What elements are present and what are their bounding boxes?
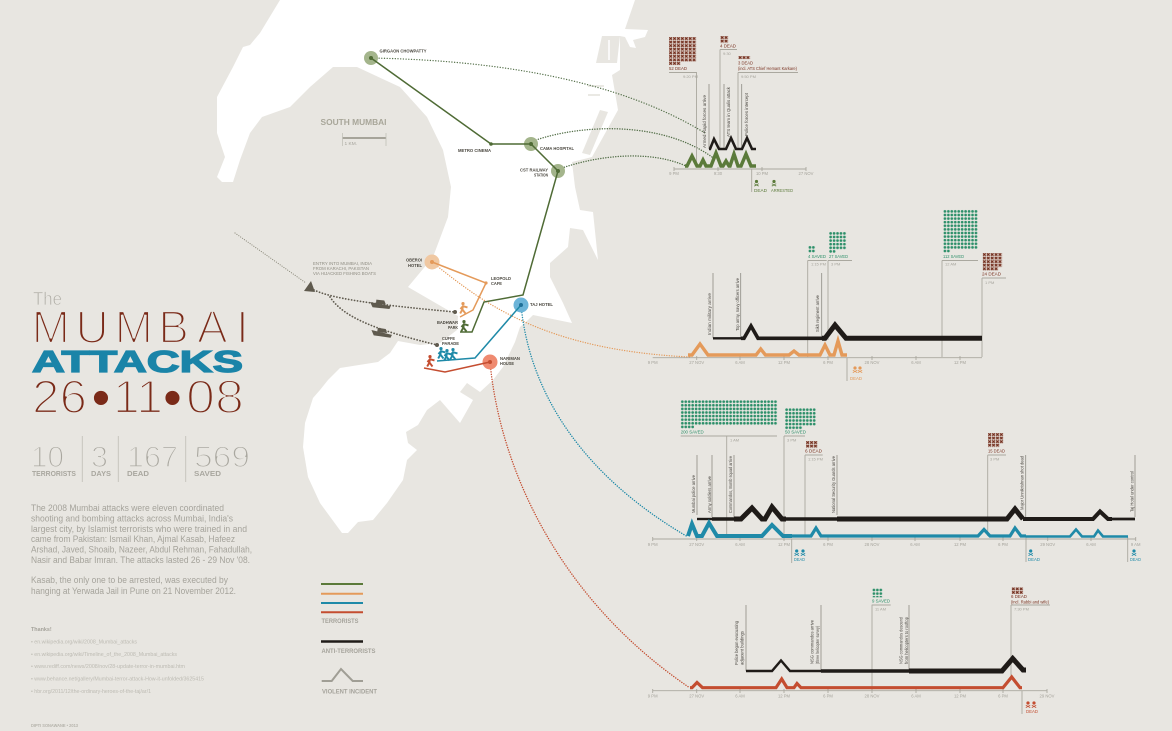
callout lines (808, 260, 1006, 381)
callout lines (872, 605, 1050, 714)
outcome: dead and arrested (754, 180, 793, 194)
map place labels: LEOPOLD (491, 276, 512, 281)
outcome: dead: DEAD (1026, 709, 1038, 715)
anti-terrorist line (697, 507, 1135, 519)
outcome: dead (850, 366, 862, 382)
axis: 27 NOV (689, 694, 704, 698)
axis: 9 PM (648, 542, 658, 547)
axis (648, 537, 1141, 547)
intro text (31, 503, 252, 597)
axis: 12 PM (954, 694, 967, 698)
annotation labels (707, 273, 822, 338)
axis (648, 689, 1055, 698)
axis: 28 NOV (865, 360, 880, 365)
axis: 12 PM (778, 542, 791, 547)
axis: 9 PM (648, 360, 658, 365)
axis: 6 AM (735, 360, 745, 365)
terrorists' sea route with boats: FROM KARACHI, PAKISTAN (313, 266, 369, 272)
credits and sources: • hbr.org/2011/12/the-ordinary-heroes-of-the-taj/ar/1 (31, 689, 151, 695)
axis: 27 NOV (799, 171, 814, 176)
annotation labels (734, 605, 910, 671)
anti-terrorist line (709, 138, 756, 149)
terrorist line (688, 523, 1128, 536)
axis: 9 PM (669, 171, 679, 176)
saved and dead counts: 6 DEAD (805, 448, 823, 454)
outcome: dead (1026, 701, 1038, 715)
annotation labels: Major Unnikrishnan shot dead (1020, 456, 1026, 510)
intro text: largest city, by Islamist terrorists who were trained in and (31, 524, 247, 535)
credits and sources: • www.behance.net/gallery/Mumbai-terror-attack-How-it-unfolded/3625415 (31, 676, 204, 682)
title: • (163, 369, 182, 427)
axis: 10 PM (756, 171, 769, 176)
axis: 6 AM (910, 542, 920, 547)
map place labels: HOUSE (500, 361, 514, 366)
outcome: dead: DEAD (794, 557, 805, 563)
saved and dead counts: 12 AM (945, 262, 956, 266)
annotation labels: Police began evacuating (734, 621, 740, 665)
saved and dead counts: 1:15 PM (811, 262, 826, 266)
legend: TERRORISTS (322, 618, 358, 625)
legend (321, 584, 377, 696)
outcome: dead: DEAD (1130, 557, 1141, 563)
annotation labels (691, 455, 1136, 519)
map place labels: PARK (448, 325, 458, 330)
title: 26 (32, 370, 87, 423)
map place labels (380, 48, 574, 366)
saved and dead counts: 7:30 PM (1014, 606, 1029, 612)
axis: 6 PM (998, 694, 1008, 698)
route: orange terrorists (424, 254, 488, 317)
credits and sources: DIPTI SONAWANE • 2013 (31, 723, 78, 729)
annotation labels: Indian military arrive (707, 293, 713, 335)
label: South Mumbai with scale: 1 KM. (344, 141, 357, 147)
axis: 29 NOV (1040, 694, 1055, 698)
key statistics: DAYS (91, 469, 111, 478)
annotation labels: (three helicopter survey) (815, 626, 821, 664)
axis (648, 356, 982, 365)
key statistics: 3 (91, 441, 108, 474)
title: ATTACKS (32, 345, 243, 379)
intro text: hanging at Yerwada Jail in Pune on 21 November 2012. (31, 586, 236, 597)
credits and sources: • en.wikipedia.org/wiki/Timeline_of_the_2008_Mumbai_attacks (31, 652, 177, 658)
label: South Mumbai with scale (320, 117, 386, 147)
dead and saved counts: 52 DEAD (669, 66, 687, 72)
axis: 12 PM (778, 694, 791, 698)
route: blue terrorists (437, 298, 528, 361)
outcome: dead and arrested: ARRESTED (771, 188, 793, 194)
annotation labels (702, 84, 750, 149)
axis: 6 AM (1086, 542, 1096, 547)
annotation labels: Commandos, Bomb squad arrive (728, 456, 734, 513)
dead and saved counts: 9:20 PM (683, 74, 698, 79)
annotation labels: Top army, navy officers arrive (735, 278, 741, 331)
map place labels: GIRGAON CHOWPATTY (380, 48, 427, 54)
timeline: Cafe/CST, green group (669, 36, 814, 194)
map place labels: CAMA HOSPITAL (540, 146, 574, 151)
dead and saved counts: 9:30 (723, 51, 732, 56)
map place labels: CUFFE (442, 336, 455, 341)
intro text: shooting and bombing attacks across Mumbai, India's (31, 514, 233, 524)
map place labels: STATION (534, 172, 548, 178)
saved and dead counts: 3 PM (990, 456, 999, 462)
saved and dead counts: 3 PM (787, 438, 796, 442)
axis: 27 NOV (689, 360, 704, 365)
dead and saved counts: 3 DEAD (738, 60, 753, 66)
key statistics: 10 (31, 441, 64, 474)
outcome: dead: DEAD (850, 376, 862, 382)
axis: 6 AM (911, 694, 921, 698)
dead and saved counts (669, 36, 797, 79)
map place labels: METRO CINEMA (458, 148, 492, 153)
dead and saved counts: (incl. ATS Chief Hemant Karkare) (738, 66, 797, 72)
anti-terrorist line (713, 325, 982, 338)
intro text: Nasir and Babar Imran. The attacks lasted 26 - 29 Nov '08. (31, 555, 250, 566)
map place labels: CST RAILWAY (520, 168, 549, 172)
saved and dead counts: 4 SAVED (808, 254, 826, 260)
annotation labels: Army soldiers arrive (707, 476, 713, 513)
map place labels: NARIMAN (500, 356, 521, 361)
label: South Mumbai with scale: SOUTH MUMBAI (320, 117, 386, 127)
annotation labels: NSG commandos descend (898, 617, 904, 664)
intro text: Arshad, Javed, Shoaib, Nazeer, Abdul Rehman, Fahadullah, (31, 544, 252, 556)
outcome: dead (794, 549, 1141, 563)
map place labels: CAFE (491, 281, 502, 286)
saved and dead counts: 11 AM (875, 606, 886, 612)
axis: 27 NOV (689, 542, 704, 547)
dead and saved counts: 4 DEAD (720, 44, 736, 50)
axis (669, 167, 814, 176)
key statistics: SAVED (194, 469, 222, 478)
route: red terrorists (424, 354, 498, 372)
key statistics: DEAD (127, 469, 150, 478)
axis: 12 PM (778, 360, 791, 365)
callout lines (669, 50, 798, 192)
title: 11 (113, 370, 163, 423)
key statistics: TERRORISTS (32, 469, 76, 478)
annotation labels: National Security Guards arrive (831, 456, 837, 513)
saved and dead counts: 1 AM (730, 438, 739, 442)
saved and dead counts: 27 SAVED (829, 254, 848, 260)
saved and dead counts: (incl. Rabbi and wife) (1011, 600, 1049, 606)
credits and sources: Thanks! (31, 627, 52, 633)
terrorist line (685, 153, 756, 166)
annotation labels: Police forces intercept (744, 92, 750, 136)
callout lines (681, 436, 1128, 563)
annotation labels: Sikh regiment arrive (815, 295, 821, 332)
credits and sources (31, 627, 204, 729)
annotation labels: Taj Hotel under control (1130, 471, 1136, 512)
saved and dead counts: 200 SAVED (681, 430, 704, 436)
key statistics: 569 (194, 441, 250, 474)
key statistics (31, 436, 250, 482)
axis: 6 AM (911, 360, 921, 365)
saved and dead counts: 3 PM (831, 262, 840, 266)
axis: 12 PM (954, 360, 967, 365)
route: green terrorists (364, 51, 565, 332)
annotation labels: from helicopters to rooftop (904, 617, 910, 664)
terrorist line (688, 341, 847, 355)
axis: 6 PM (823, 542, 833, 547)
timeline: Taj Hotel, blue group (648, 400, 1141, 563)
axis: 6 PM (998, 542, 1008, 547)
saved and dead counts: 1 PM (985, 280, 994, 285)
axis: 29 NOV (1040, 542, 1055, 547)
credits and sources: • www.rediff.com/news/2008/nov/28-update-terror-in-mumbai.htm (31, 664, 185, 670)
axis: 28 NOV (865, 542, 880, 547)
saved and dead counts: 1:15 PM (808, 456, 823, 462)
saved and dead counts: 50 SAVED (785, 430, 806, 436)
credits and sources: • en.wikipedia.org/wiki/2008_Mumbai_attacks (31, 640, 137, 646)
title (32, 289, 249, 427)
dead and saved counts: 9:50 PM (741, 74, 756, 79)
saved and dead counts (681, 400, 1005, 462)
saved and dead counts: 9 SAVED (872, 598, 890, 604)
terrorists' sea route with boats: ENTRY INTO MUMBAI, INDIA (313, 261, 373, 267)
title: • (92, 369, 110, 427)
title: 08 (186, 370, 244, 423)
map: south Mumbai land mass (217, 0, 648, 533)
anti-terrorist line (746, 658, 1026, 671)
timeline: Oberoi Hotel, orange group (648, 210, 1006, 382)
key statistics: 167 (127, 441, 178, 474)
map place labels: OBEROI (406, 258, 422, 262)
annotation labels: adjacent buildings (740, 630, 746, 665)
map place labels: HOTEL (408, 263, 422, 268)
outcome: dead: DEAD (1028, 557, 1040, 563)
map place labels: PARADE (442, 341, 459, 346)
map place labels: TAJ HOTEL (530, 302, 553, 307)
saved and dead counts: 15 DEAD (988, 448, 1005, 454)
intro text: came from Pakistan: Ismail Khan, Ajmal Kasab, Hafeez (31, 534, 235, 545)
axis: 6 PM (823, 360, 833, 365)
terrorist line (690, 677, 1022, 688)
title: The (33, 289, 62, 309)
timeline: Nariman House, red group (648, 587, 1055, 715)
saved and dead counts: 24 DEAD (982, 272, 1002, 278)
terrorists' sea route with boats: VIA HIJACKED FISHING BOATS (313, 271, 376, 277)
axis: 6 AM (735, 542, 745, 547)
intro text: Kasab, the only one to be arrested, was executed by (31, 575, 228, 586)
annotation labels: NSG commandos arrive (810, 620, 816, 664)
legend: VIOLENT INCIDENT (322, 688, 377, 696)
annotation labels: ATS team in Qualis attack (726, 86, 732, 137)
axis: 12 PM (954, 542, 967, 547)
saved and dead counts (808, 210, 1002, 285)
legend: ANTI-TERRORISTS (322, 648, 376, 655)
saved and dead counts: 112 SAVED (943, 254, 964, 260)
title: MUMBAI (32, 301, 249, 353)
terrorists' sea route with boats (235, 233, 457, 347)
axis: 6 AM (735, 694, 745, 698)
axis: 9 PM (648, 694, 658, 698)
axis: 9 AM (1131, 542, 1141, 547)
intro text: The 2008 Mumbai attacks were eleven coordinated (31, 503, 224, 514)
axis: 28 NOV (865, 694, 880, 698)
saved and dead counts: 6 DEAD (1011, 594, 1027, 600)
annotation labels: Armed Rapid forces arrive (702, 95, 708, 148)
dotted connectors from map to timelines (371, 58, 712, 688)
axis: 6 PM (823, 694, 833, 698)
annotation labels: Mumbai police arrive (691, 475, 697, 513)
map place labels: BADHWAR (437, 320, 459, 325)
saved and dead counts (872, 587, 1049, 612)
axis: 9:30 (714, 171, 723, 176)
outcome: dead and arrested: DEAD (754, 188, 768, 194)
